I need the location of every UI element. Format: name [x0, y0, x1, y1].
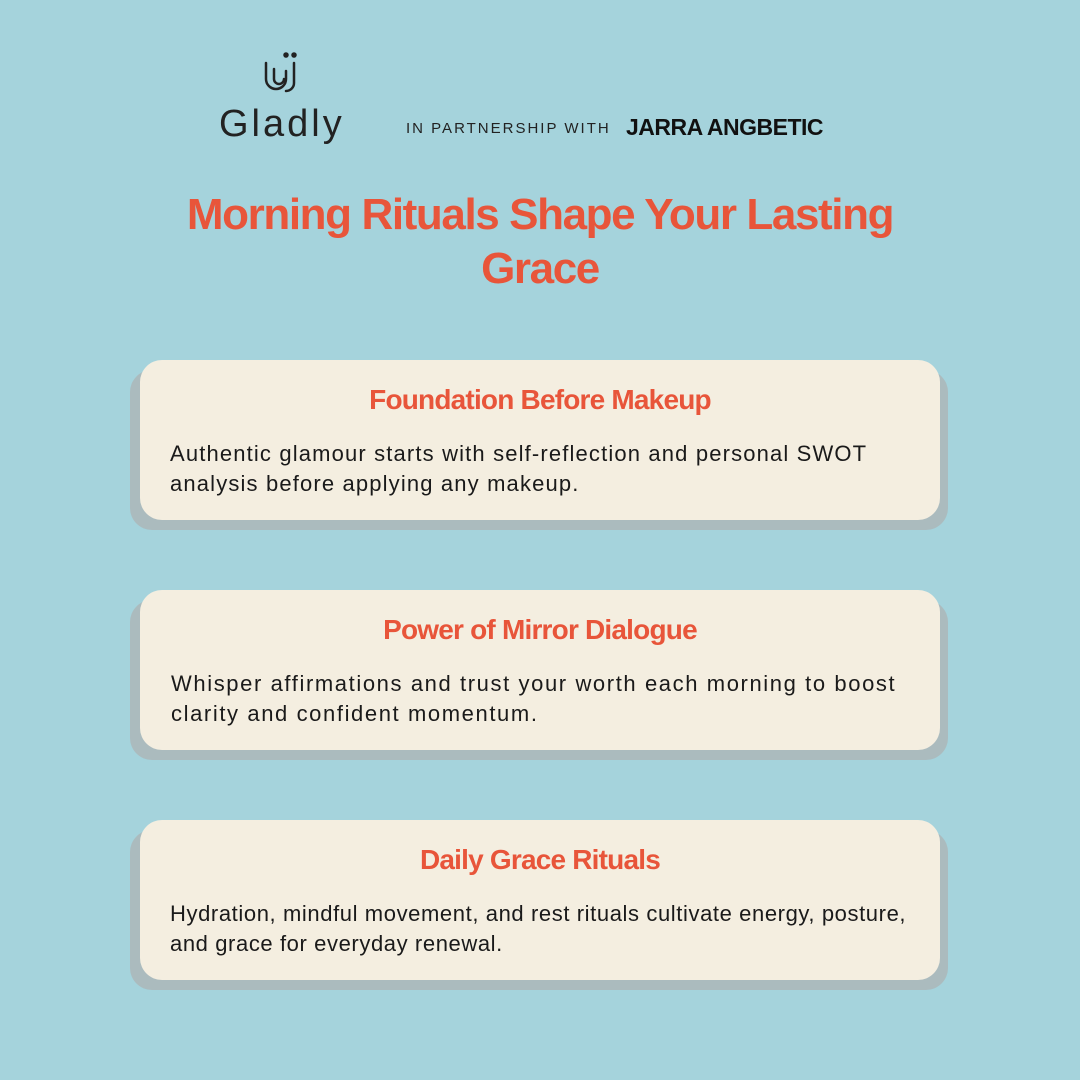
panel: foundation [130, 370, 948, 530]
heading: Foundation Before Makeup [369, 384, 711, 415]
text [171, 671, 896, 726]
heading: Power of Mirror Dialogue [383, 614, 697, 645]
text: Hydration, mindful movement, and rest rituals cultivate energy, posture, [170, 901, 906, 926]
partner name: JARRA ANGBETIC [626, 114, 823, 140]
text: clarity and confident momentum. [171, 701, 539, 726]
text: Whisper affirmations and trust your worth each morning to boost [171, 671, 896, 696]
text [170, 441, 867, 496]
text [170, 901, 906, 956]
partnership text: IN PARTNERSHIP WITH [406, 120, 611, 137]
panel: mirror [130, 600, 948, 760]
heading: Daily Grace Rituals [420, 844, 660, 875]
logo: Gladly [219, 52, 345, 145]
logo text: Gladly [219, 103, 345, 145]
icon: gladly mark [264, 52, 297, 92]
text: and grace for everyday renewal. [170, 931, 503, 956]
text: Authentic glamour starts with self-reflection and personal SWOT [170, 441, 867, 466]
title: Morning Rituals Shape Your Lasting Grace [187, 190, 893, 293]
panel: daily grace [130, 830, 948, 990]
text: analysis before applying any makeup. [170, 471, 580, 496]
